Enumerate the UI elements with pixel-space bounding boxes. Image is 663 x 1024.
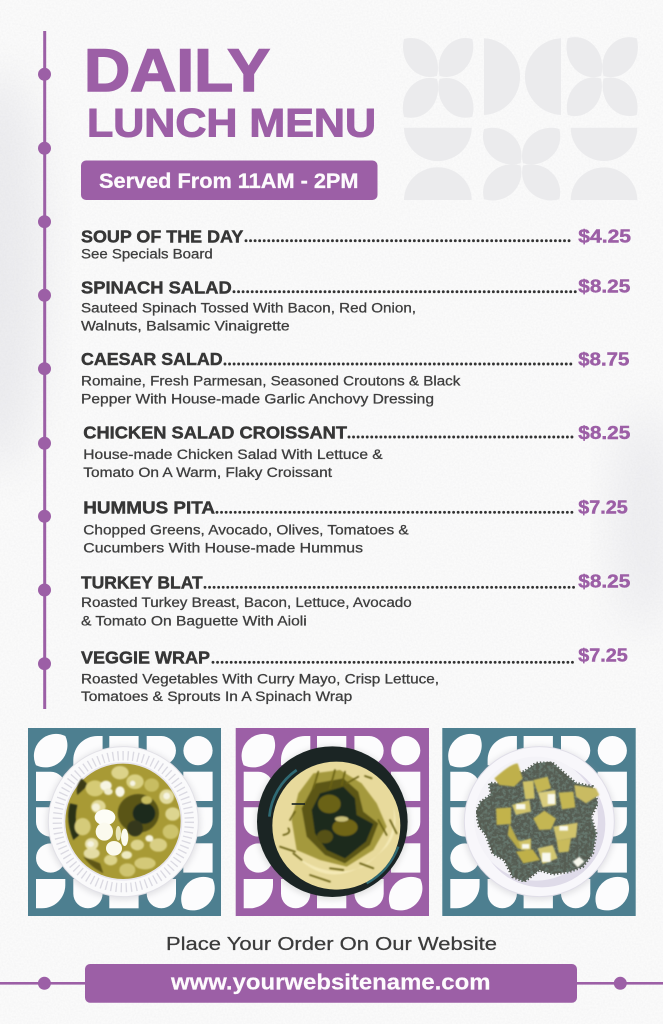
- menu item: soup of the day: $4.25: [578, 226, 631, 246]
- menu item: chicken salad croissant: [83, 422, 630, 480]
- photo panel: hummus bowl on purple tiles: [236, 728, 429, 916]
- menu item: soup of the day: SOUP OF THE DAY: [81, 226, 244, 246]
- menu item: veggie wrap: Roasted Vegetables With Curry Mayo, Crisp Lettuce,: [81, 671, 439, 686]
- menu item: caesar salad: Pepper With House-made Garlic Anchovy Dressing: [81, 392, 434, 407]
- menu item: soup of the day: [81, 226, 631, 262]
- menu item: chicken salad croissant: Tomato On A Warm, Flaky Croissant: [83, 465, 332, 480]
- menu item: spinach salad: [81, 276, 630, 333]
- menu item: caesar salad: $8.75: [578, 350, 629, 370]
- menu item: caesar salad: [81, 349, 629, 407]
- menu item: veggie wrap: VEGGIE WRAP: [81, 647, 210, 667]
- menu item: spinach salad: Walnuts, Balsamic Vinaigrette: [81, 318, 290, 333]
- menu item: turkey blat: $8.25: [578, 572, 630, 592]
- food: hummus: [257, 746, 408, 897]
- menu item: hummus pita: Cucumbers With House-made Hummus: [83, 540, 363, 555]
- menu item: hummus pita: HUMMUS PITA: [83, 497, 215, 517]
- title: LUNCH MENU: [87, 102, 376, 146]
- photo panel: spinach and tofu plate on teal tiles: [442, 728, 636, 916]
- menu item: veggie wrap: [81, 645, 628, 704]
- serving hours badge: [81, 160, 378, 200]
- photo panel: soup bowl on teal tiles: [28, 728, 221, 916]
- menu item: turkey blat: & Tomato On Baguette With Aioli: [81, 613, 307, 628]
- footer connector line right: [576, 977, 663, 990]
- menu item: spinach salad: $8.25: [578, 276, 630, 296]
- menu item: hummus pita: Chopped Greens, Avocado, Olives, Tomatoes &: [83, 522, 409, 537]
- footer connector line left: [0, 977, 86, 990]
- food: spinach and tofu: [464, 747, 614, 897]
- menu item: turkey blat: Roasted Turkey Breast, Bacon, Lettuce, Avocado: [81, 595, 412, 610]
- menu item: veggie wrap: $7.25: [578, 645, 628, 665]
- call to action text: Place Your Order On Our Website: [166, 933, 497, 954]
- serving hours badge: Served From 11AM - 2PM: [99, 170, 358, 193]
- menu item: chicken salad croissant: CHICKEN SALAD CROISSANT: [83, 422, 347, 442]
- timeline spine with dots: [38, 31, 51, 709]
- menu item: veggie wrap: Tomatoes & Sprouts In A Spinach Wrap: [81, 689, 352, 704]
- title: [84, 37, 376, 146]
- menu item: hummus pita: [83, 497, 628, 555]
- website address button: www.yourwebsitename.com: [170, 970, 491, 994]
- website address button: [85, 964, 577, 1003]
- menu item: spinach salad: Sauteed Spinach Tossed With Bacon, Red Onion,: [81, 300, 416, 315]
- menu item: chicken salad croissant: $8.25: [578, 423, 630, 443]
- food: soup: [48, 747, 198, 897]
- title: DAILY: [84, 37, 270, 104]
- menu item: hummus pita: $7.25: [578, 497, 628, 517]
- menu item: chicken salad croissant: House-made Chicken Salad With Lettuce &: [83, 447, 383, 462]
- decorative geometric pattern: [403, 37, 638, 201]
- menu item: turkey blat: [81, 572, 630, 628]
- menu item: turkey blat: TURKEY BLAT: [81, 572, 203, 592]
- menu item: soup of the day: See Specials Board: [81, 247, 213, 262]
- menu item: caesar salad: Romaine, Fresh Parmesan, Seasoned Croutons & Black: [81, 373, 461, 388]
- menu item: caesar salad: CAESAR SALAD: [81, 349, 223, 369]
- menu item: spinach salad: SPINACH SALAD: [81, 277, 232, 297]
